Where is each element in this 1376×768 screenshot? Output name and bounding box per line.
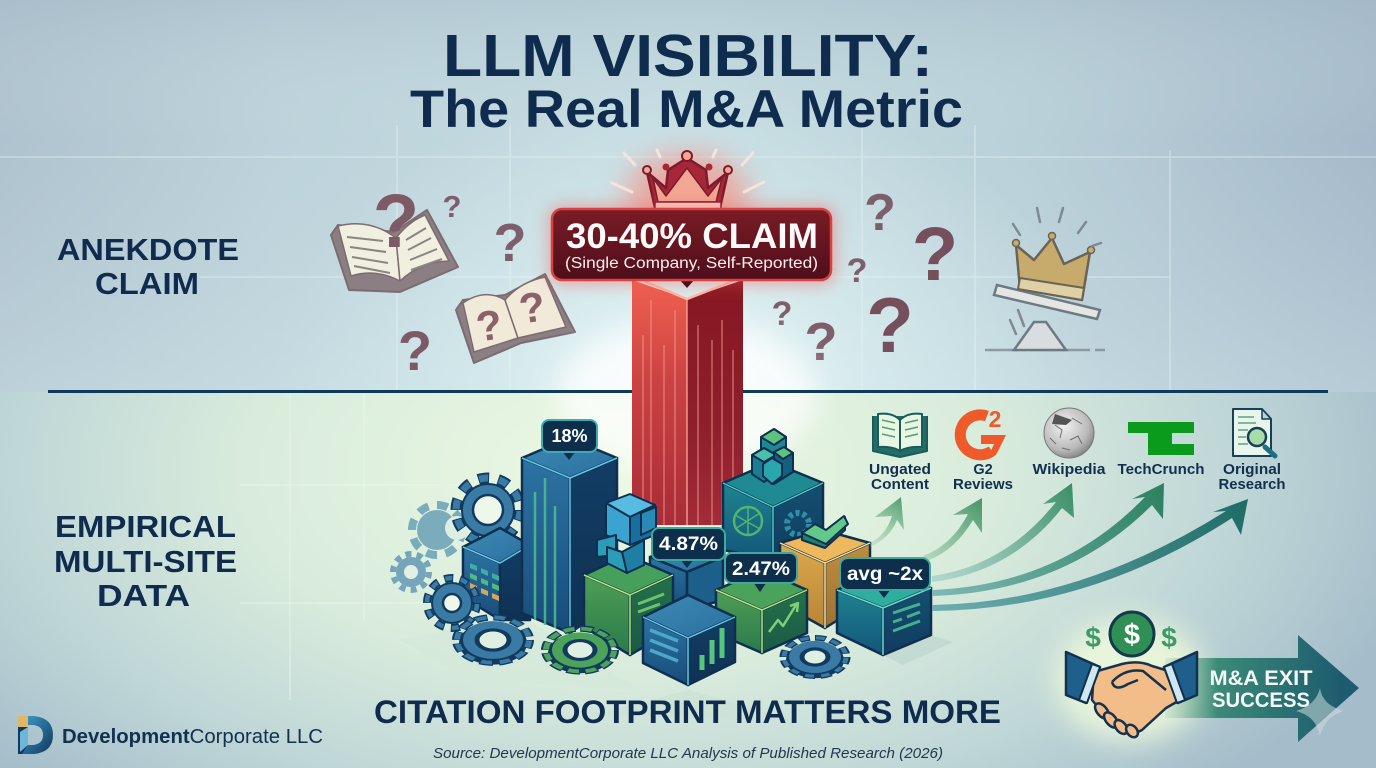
arrow: to original research — [932, 499, 1248, 611]
badge: 18%: 18% — [551, 426, 588, 446]
icon: G2 logo: 2 — [989, 406, 1001, 432]
gear: pale left — [412, 505, 469, 555]
title: The Real M&A Metric — [410, 80, 963, 139]
arrow: to ungated content — [870, 497, 904, 547]
icon: blue cube stack on green box — [597, 494, 656, 573]
icon: open book with two question marks: ? — [516, 282, 548, 333]
gear: medium — [427, 578, 477, 628]
label: original research: Research — [1218, 477, 1286, 493]
block: data grid box — [463, 528, 530, 620]
label: G2 reviews: G2 — [973, 462, 993, 478]
badge: 4.87%: 4.87% — [659, 534, 718, 555]
arrow: to Wikipedia — [932, 483, 1074, 582]
label: ungated content: Ungated — [869, 462, 931, 478]
background: lower empirical zone — [0, 392, 1376, 768]
icon: handshake with dollars — [1066, 612, 1197, 740]
icon: crown — [612, 150, 764, 210]
arrow: to G2 reviews — [923, 498, 982, 560]
question mark cluster right: ? — [804, 312, 838, 372]
label: ungated content — [869, 462, 931, 493]
logo: DevelopmentCorporate LLC: DevelopmentCorporate LLC — [62, 725, 323, 748]
question mark middle: ? — [494, 213, 526, 273]
label: Wikipedia: Wikipedia — [1032, 462, 1106, 478]
callout: 30-40% claim — [548, 205, 836, 288]
background: upper anecdote zone — [0, 0, 1376, 392]
icon: Wikipedia globe — [1044, 408, 1094, 458]
red glow behind tower — [557, 153, 817, 470]
question mark bottom left: ? — [398, 319, 432, 382]
icon: ungated content book — [873, 414, 927, 457]
icon: original research document — [1233, 409, 1275, 456]
icon: TechCrunch logo — [1128, 422, 1194, 455]
gear: small pale — [393, 554, 429, 590]
icon: G2 logo — [960, 406, 1006, 455]
block: teal box avg — [837, 570, 931, 655]
block: green box — [584, 555, 673, 655]
badge: avg ~2x — [840, 558, 930, 598]
callout: 30-40% claim: 30-40% CLAIM — [566, 217, 818, 256]
gear: flat blue left — [457, 617, 529, 665]
question mark cluster right: ? — [864, 184, 896, 242]
source line: Source: DevelopmentCorporate LLC Analysis of Published Research (2026) — [433, 745, 943, 762]
gear: flat green — [546, 629, 614, 673]
label: ungated content: Content — [871, 477, 929, 493]
icon: green check block on gold box — [802, 516, 848, 548]
badge: 2.47% — [725, 553, 797, 592]
label: G2 reviews: Reviews — [953, 477, 1013, 493]
icon: open book with two question marks — [456, 274, 575, 363]
gear: flat blue right — [784, 638, 846, 678]
icon: handshake with dollars: $ — [1161, 622, 1177, 653]
icon: open book with question mark: ? — [373, 179, 419, 264]
arrow: M&A exit success: SUCCESS — [1212, 689, 1310, 712]
callout: 30-40% claim: (Single Company, Self-Reported) — [565, 255, 818, 272]
badge: 2.47%: 2.47% — [732, 559, 790, 580]
question mark cluster right: ? — [772, 295, 792, 333]
label: TechCrunch: TechCrunch — [1118, 462, 1204, 478]
title: LLM VISIBILITY: — [443, 23, 933, 89]
block: tall blue bar 18% — [522, 438, 617, 633]
label: original research: Original — [1223, 462, 1281, 478]
label: empirical multi-site data — [54, 509, 237, 613]
arrow: to TechCrunch — [932, 483, 1164, 596]
heading: citation footprint matters more: CITATION FOOTPRINT MATTERS MORE — [374, 694, 1001, 730]
block: gold box — [780, 530, 870, 628]
icon: handshake with dollars: $ — [1124, 619, 1140, 651]
badge: 4.87% — [652, 528, 725, 568]
title — [410, 23, 963, 139]
gear: large behind data box — [456, 478, 520, 542]
badge: 18% — [542, 420, 597, 460]
ground shadows — [400, 615, 953, 720]
icon: small cube cluster — [752, 429, 793, 484]
logo: DevelopmentCorporate LLC — [18, 716, 323, 754]
question mark cluster right: ? — [866, 281, 914, 369]
label: G2 reviews — [953, 462, 1013, 493]
label: empirical multi-site data: DATA — [97, 578, 190, 613]
question mark cluster right — [772, 184, 958, 372]
block: teal globe box — [723, 462, 823, 560]
question mark cluster right: ? — [847, 252, 867, 290]
divider line — [48, 390, 1328, 393]
block: front blue box — [643, 595, 735, 685]
label: empirical multi-site data: MULTI-SITE — [54, 544, 237, 579]
question mark cluster right: ? — [912, 212, 958, 297]
badge: avg ~2x: avg ~2x — [847, 564, 923, 585]
icon: open book with two question marks: ? — [473, 300, 505, 351]
block: back blue box under 4.87% — [650, 540, 723, 610]
arrow: M&A exit success: M&A EXIT — [1210, 667, 1313, 690]
label: anekdote claim: CLAIM — [95, 266, 199, 301]
label: original research — [1218, 462, 1286, 493]
label: anekdote claim — [57, 232, 239, 301]
tall red bar: 30-40% claim — [632, 280, 743, 525]
label: empirical multi-site data: EMPIRICAL — [55, 509, 236, 544]
icon: tilted crown on balance — [985, 208, 1105, 350]
block: green box with trend arrow — [716, 570, 807, 653]
icon: open book with question mark — [331, 179, 458, 292]
question mark small top: ? — [443, 189, 461, 224]
arrow: M&A exit success — [1055, 618, 1359, 742]
icon: handshake with dollars: $ — [1085, 622, 1101, 653]
label: anekdote claim: ANEKDOTE — [57, 232, 239, 267]
